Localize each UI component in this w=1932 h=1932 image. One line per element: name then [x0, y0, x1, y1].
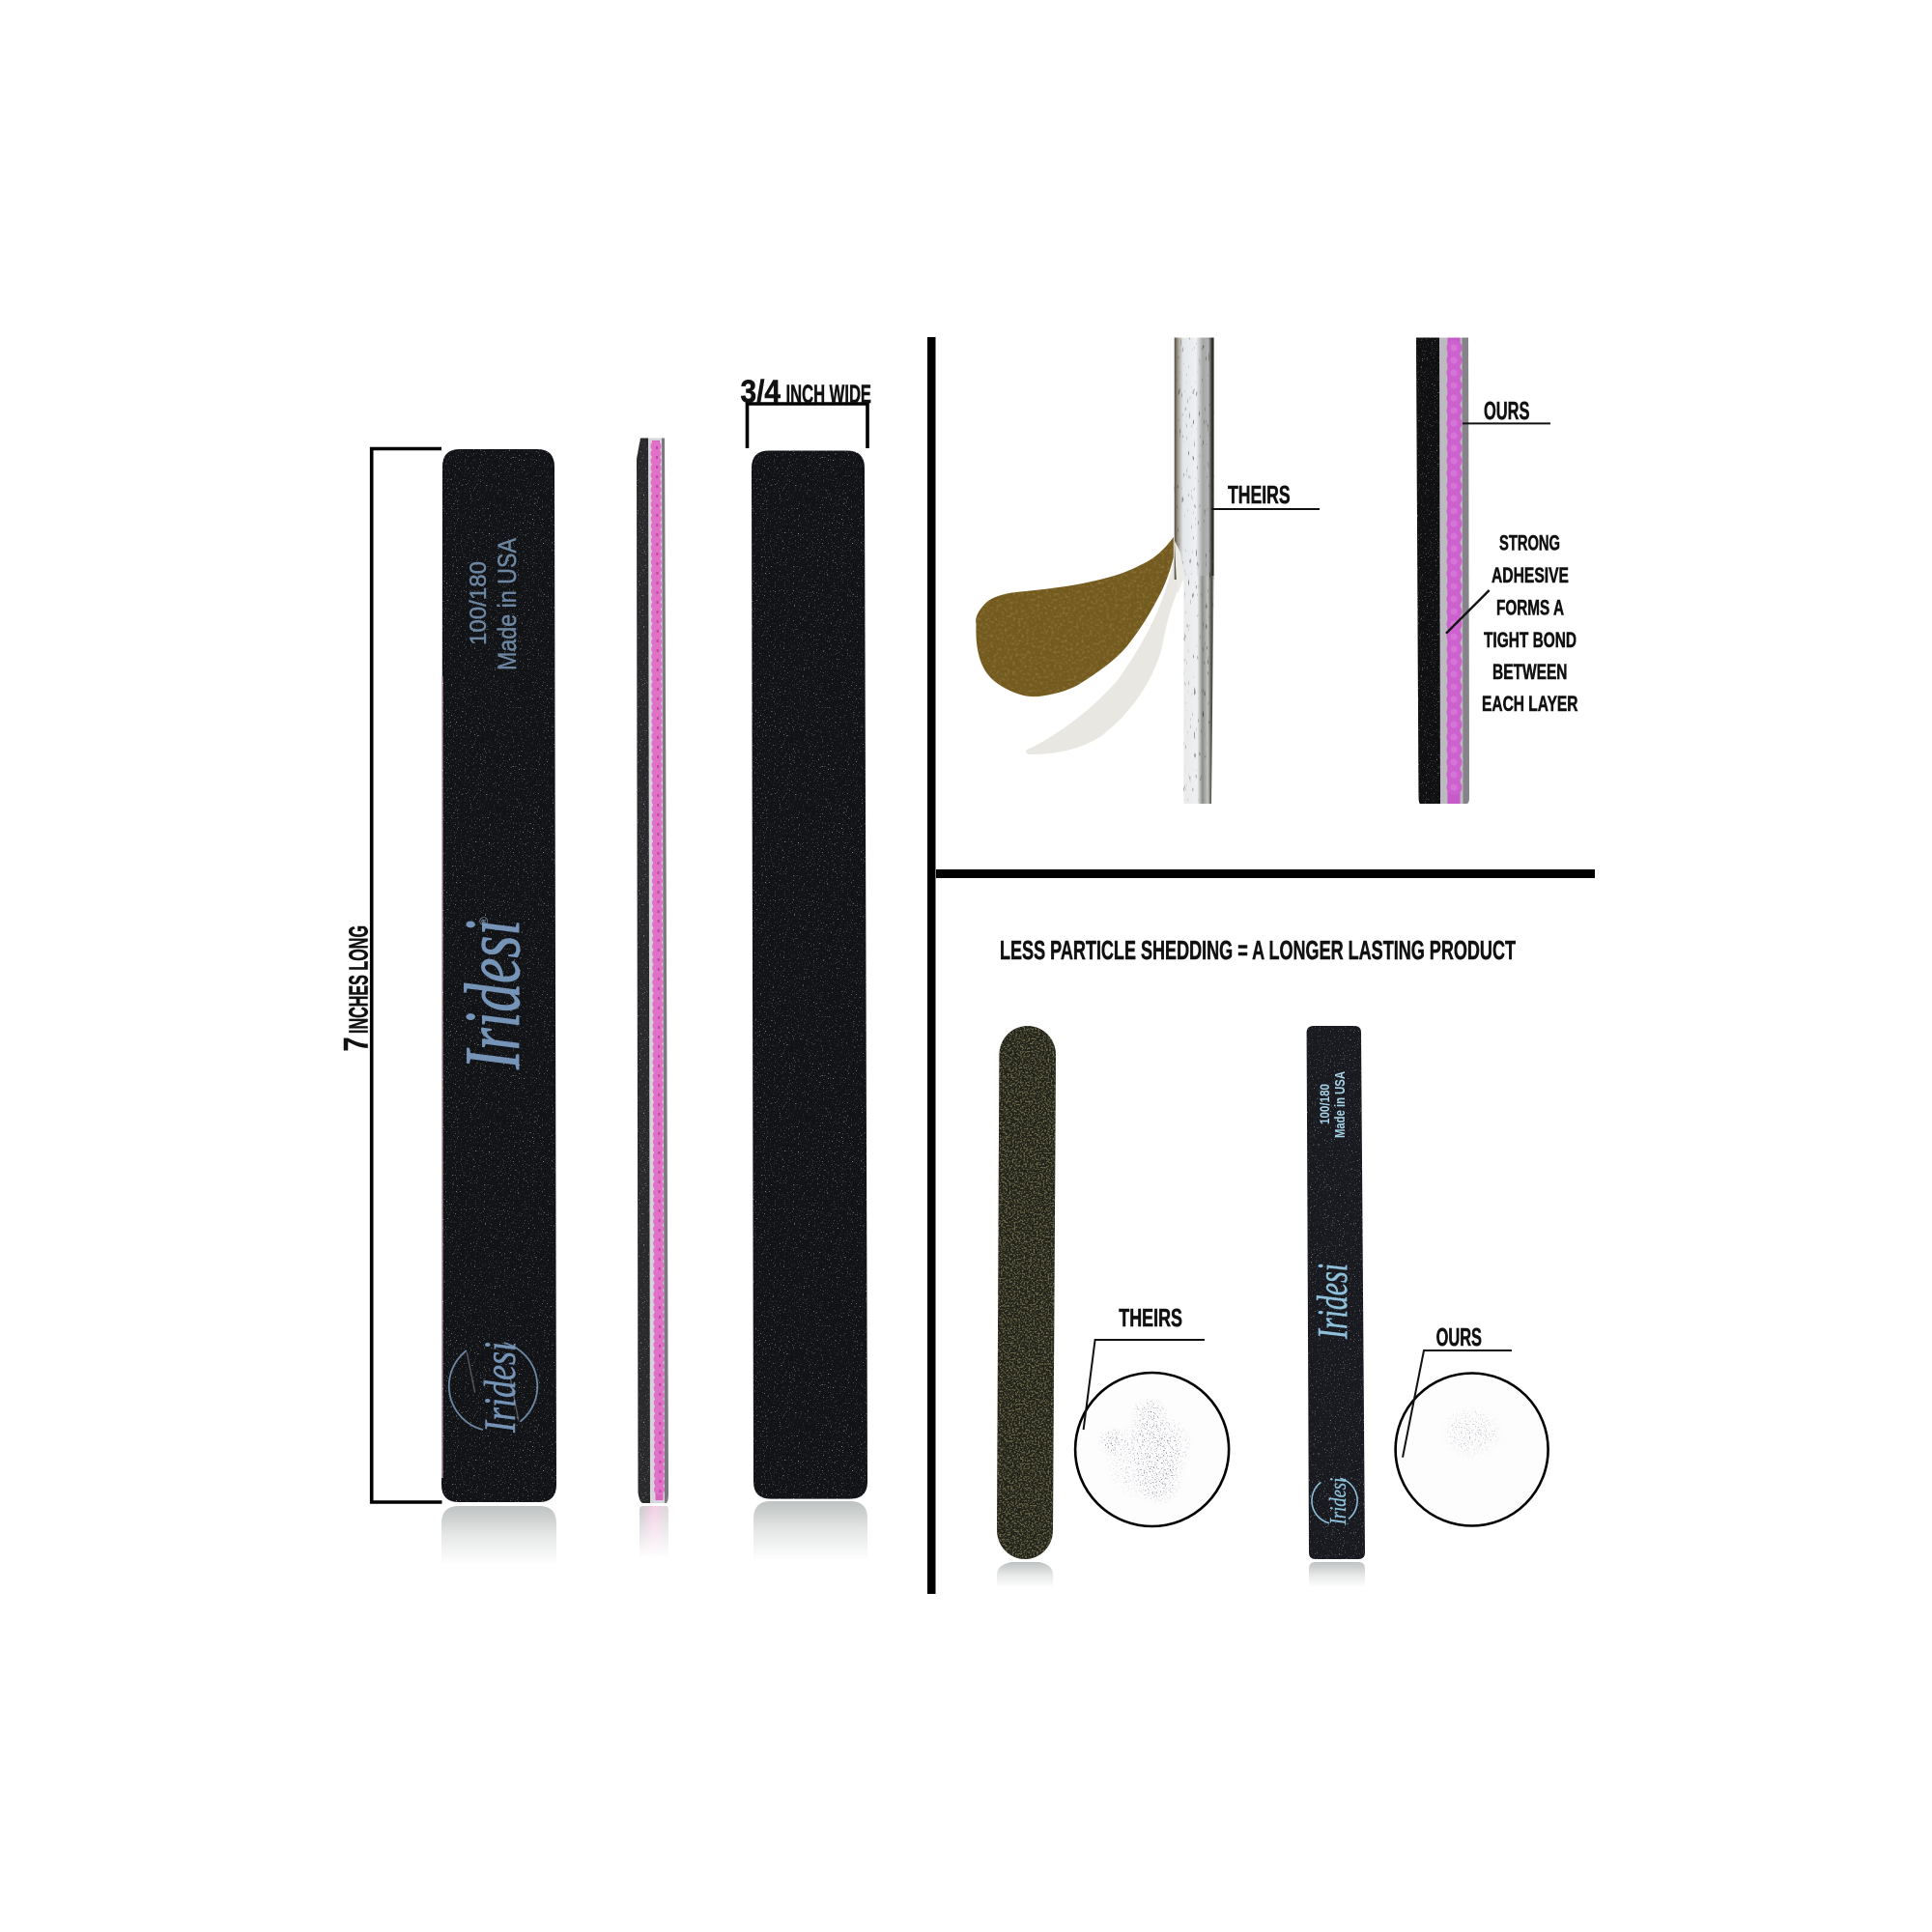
label: 3/4 inch wide: 3/4: [740, 373, 781, 410]
grit text small: [1317, 1071, 1349, 1138]
label: 3/4 inch wide: [740, 373, 871, 410]
callout: strong adhesive: EACH LAYER: [1482, 692, 1578, 716]
label: ours particles: OURS: [1436, 1322, 1482, 1351]
grit text small: Made in USA: [1332, 1071, 1349, 1138]
circular logo: [449, 1342, 537, 1434]
label: ours particles: [1403, 1322, 1512, 1458]
label: 7 inches long: INCHES LONG: [344, 925, 374, 1034]
theirs file: [997, 1026, 1056, 1559]
ours particle circle: [1396, 1374, 1548, 1526]
callout: strong adhesive: BETWEEN: [1492, 660, 1567, 684]
panel: layer comparison: [976, 338, 1578, 804]
theirs particle circle: [1075, 1373, 1229, 1526]
label: 3/4 inch wide: INCH WIDE: [786, 380, 871, 409]
callout: strong adhesive: FORMS A: [1496, 596, 1564, 620]
brand wordmark: Iridesi: [448, 920, 536, 1070]
brand wordmark: ®: [477, 917, 491, 925]
grit text: Made in USA: [493, 538, 522, 670]
label: 7 inches long: [338, 925, 376, 1051]
brown abrasive layer peeling: [976, 537, 1174, 696]
callout: strong adhesive: STRONG: [1499, 531, 1560, 555]
reflection: file front: [441, 1506, 556, 1565]
theirs: delaminating strip: [976, 338, 1214, 804]
circular logo small: [1312, 1478, 1357, 1525]
nail file front with logo: [441, 449, 556, 1502]
label: theirs particles: THEIRS: [1119, 1303, 1182, 1332]
lower strip: [1183, 576, 1214, 804]
panel: particle shedding: [997, 935, 1548, 1587]
reflection: file back: [753, 1501, 867, 1561]
vertical divider: [927, 337, 935, 1594]
strip splitting gap: [1175, 541, 1184, 594]
upper strip: [1175, 338, 1214, 580]
length bracket: [372, 448, 442, 1502]
grit text: [466, 538, 522, 670]
nail file side view: [637, 439, 668, 1503]
label: 7 inches long: 7: [338, 1037, 376, 1051]
callout: strong adhesive: ADHESIVE: [1492, 563, 1569, 587]
horizontal divider: [936, 869, 1595, 878]
nail file back: [752, 450, 867, 1499]
heading: LESS PARTICLE SHEDDING = A LONGER LASTING PRODUCT: [1000, 935, 1516, 965]
callout: strong adhesive: [1446, 531, 1578, 716]
particle cloud: [1097, 1396, 1194, 1506]
callout: strong adhesive: TIGHT BOND: [1484, 628, 1577, 652]
width bracket: [748, 404, 867, 448]
label: theirs: THEIRS: [1228, 480, 1291, 509]
circular logo: Iridesi: [475, 1342, 526, 1434]
circular logo small: Iridesi: [1325, 1478, 1351, 1525]
grit text small: 100/180: [1317, 1084, 1332, 1124]
ours: bonded strip: [1416, 338, 1469, 804]
reflection: file side: [638, 1506, 670, 1558]
reflection: ours file: [1309, 1562, 1365, 1587]
ours file: [1307, 1026, 1365, 1559]
reflection: theirs file: [997, 1562, 1053, 1587]
label: ours: OURS: [1484, 396, 1530, 425]
grit text: 100/180: [466, 561, 492, 645]
brand wordmark small: Iridesi: [1309, 1264, 1356, 1340]
white layer peeling: [1026, 551, 1183, 754]
label: theirs particles: [1084, 1303, 1205, 1430]
panel: dimensions: [338, 373, 871, 1565]
particle cloud: [1439, 1405, 1505, 1461]
